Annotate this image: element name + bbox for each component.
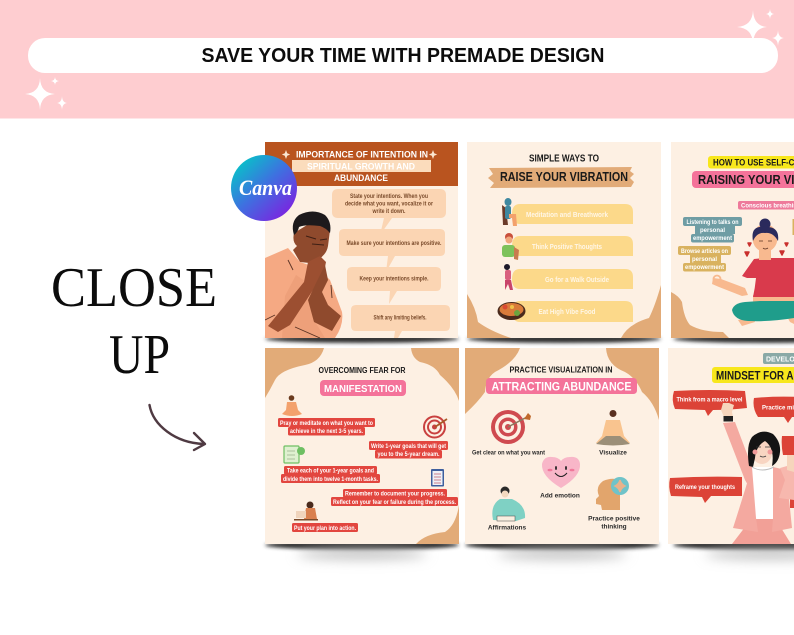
list item 1: [502, 198, 633, 226]
illustration: woman cheering: [721, 403, 794, 544]
speech bubble 1: [332, 189, 446, 235]
speech bubble 1: write it down.: [372, 209, 406, 215]
panel title: SPIRITUAL GROWTH AND: [307, 162, 415, 172]
corner blobs: [265, 348, 459, 544]
speech bubble: macro level: [673, 390, 747, 416]
label: browse articles: [678, 246, 731, 272]
speech bubble: reframe: [669, 477, 742, 503]
header band: [265, 142, 458, 186]
step 4 label: [331, 489, 458, 506]
step 1 label: achieve in the next 3-5 years.: [290, 429, 363, 435]
panel: how to use self-care: [671, 142, 794, 338]
banner heading: SAVE YOUR TIME WITH PREMADE DESIGN: [202, 45, 604, 67]
speech bubble 4: [351, 305, 450, 338]
speech bubble: practice: [754, 397, 794, 423]
label: browse articles: empowerment: [685, 265, 724, 271]
partial bubbles: [782, 436, 794, 508]
step 2 label: you to the 5-year dream.: [378, 452, 440, 458]
panel: practice visualization: [465, 348, 659, 544]
speech bubble 3: Keep your intentions simple.: [360, 276, 429, 282]
speech bubble 2: [339, 229, 445, 272]
list item 3: [504, 264, 633, 290]
title stars: [282, 150, 437, 159]
list item 2: Think Positive Thoughts: [532, 242, 602, 251]
corner blobs: [465, 348, 659, 420]
label: visualize: Visualize: [599, 450, 627, 456]
speech bubble 1: decide what you want, vocalize it or: [345, 202, 434, 208]
close up heading: CLOSE: [51, 257, 217, 319]
icon: clipboard: [431, 469, 444, 486]
step 2 label: Write 1-year goals that will get: [371, 444, 446, 450]
close up heading: [51, 257, 217, 386]
label: practice positive thinking: Practice positive: [588, 516, 640, 522]
top pink banner: [0, 0, 794, 118]
heading: OVERCOMING FEAR FOR: [318, 366, 406, 375]
icon: seated woman: [502, 198, 517, 226]
icon: canva badge: Canva: [239, 175, 292, 200]
speech bubble: macro level: Think from a macro level: [676, 398, 743, 404]
step 5 label: [292, 523, 358, 532]
speech bubble 2: Make sure your intentions are positive.: [346, 241, 442, 247]
corner blob: [671, 292, 729, 338]
label: browse articles: Browse articles on: [681, 249, 728, 255]
panel title: IMPORTANCE OF INTENTION IN: [296, 150, 428, 160]
label: browse articles: personal: [692, 257, 717, 263]
list item 1: Meditation and Breathwork: [526, 210, 609, 219]
label: practice positive thinking: [588, 516, 640, 530]
icon: man writing affirmations: [492, 486, 525, 521]
icon: head with lotus: [596, 477, 629, 510]
step 3 label: [281, 466, 380, 483]
step 3 label: divide them into twelve 1-month tasks.: [283, 477, 378, 483]
step 2 label: [369, 441, 448, 458]
panel title: [296, 150, 428, 184]
step 1 label: [278, 418, 375, 436]
panel title: ABUNDANCE: [334, 173, 388, 184]
icon: target with arrow: [491, 410, 531, 444]
panel: importance of intention: [265, 142, 458, 338]
corner blobs: [467, 285, 661, 338]
step 3 label: Take each of your 1-year goals and: [287, 468, 374, 474]
list item 4: Eat High Vibe Food: [538, 307, 596, 316]
icon: food bowl: [498, 302, 526, 320]
label: affirmations: Affirmations: [488, 524, 527, 532]
sparkles bottom left: [25, 77, 67, 110]
banner pill: [28, 38, 778, 73]
label: listening to talks: Listening to talks on: [686, 220, 739, 226]
icon: canva badge: [231, 155, 297, 221]
icon: walking woman: [504, 264, 513, 290]
panel shadows: [265, 335, 794, 559]
label: listening to talks: [683, 217, 742, 242]
speech bubble 3: [347, 267, 441, 304]
pink heading tag: ATTRACTING ABUNDANCE: [492, 380, 632, 394]
pink heading tag: MANIFESTATION: [324, 383, 402, 395]
icon: checklist: [284, 446, 305, 463]
panel: overcoming fear: [265, 348, 459, 544]
step 4 label: Remember to document your progress.: [345, 492, 445, 498]
speech bubble 4: Shift any limiting beliefs.: [374, 316, 427, 322]
grey heading tag: [763, 353, 794, 364]
step 5 label: Put your plan into action.: [294, 526, 356, 532]
panel: developing mindset: [668, 348, 794, 544]
illustration: praying man: [265, 212, 342, 338]
brush stroke heading: [488, 167, 634, 188]
pink heading tag: [320, 380, 406, 396]
brush stroke heading: RAISE YOUR VIBRATION: [500, 169, 628, 184]
label: conscious breathing: [738, 201, 794, 210]
step 1 label: Pray or meditate on what you want to: [280, 421, 373, 427]
speech bubble 1: State your intentions. When you: [350, 194, 428, 200]
gold label edge: [792, 219, 794, 235]
label: listening to talks: empowerment: [693, 236, 732, 242]
icon: target: [424, 416, 447, 438]
arrow: [150, 405, 205, 450]
speech bubble: reframe: Reframe your thoughts: [675, 485, 736, 491]
hearts: [745, 243, 788, 256]
icon: meditating person: [282, 395, 302, 416]
label: get clear: Get clear on what you want: [472, 450, 546, 456]
icon: smiling heart: [542, 457, 580, 488]
sparkles top right: [737, 9, 784, 46]
label: practice positive thinking: thinking: [601, 524, 627, 530]
illustration: meditating woman: [712, 218, 794, 326]
step 4 label: Reflect on your fear or failure during the process.: [333, 500, 456, 506]
icon: person at laptop: [294, 502, 318, 520]
heading: SIMPLE WAYS TO: [529, 154, 599, 164]
panel: raise your vibration: [467, 142, 661, 338]
header highlight: [292, 160, 431, 172]
icon: thinking person: [502, 233, 519, 260]
icon: meditating man: [596, 410, 630, 446]
label: add emotion: Add emotion: [540, 492, 580, 500]
close up heading: UP: [109, 324, 170, 386]
label: listening to talks: personal: [700, 228, 725, 234]
heading: PRACTICE VISUALIZATION IN: [510, 364, 612, 374]
list item 4: [498, 301, 633, 322]
list item 3: Go for a Walk Outside: [545, 275, 609, 284]
list item 2: [502, 233, 633, 260]
